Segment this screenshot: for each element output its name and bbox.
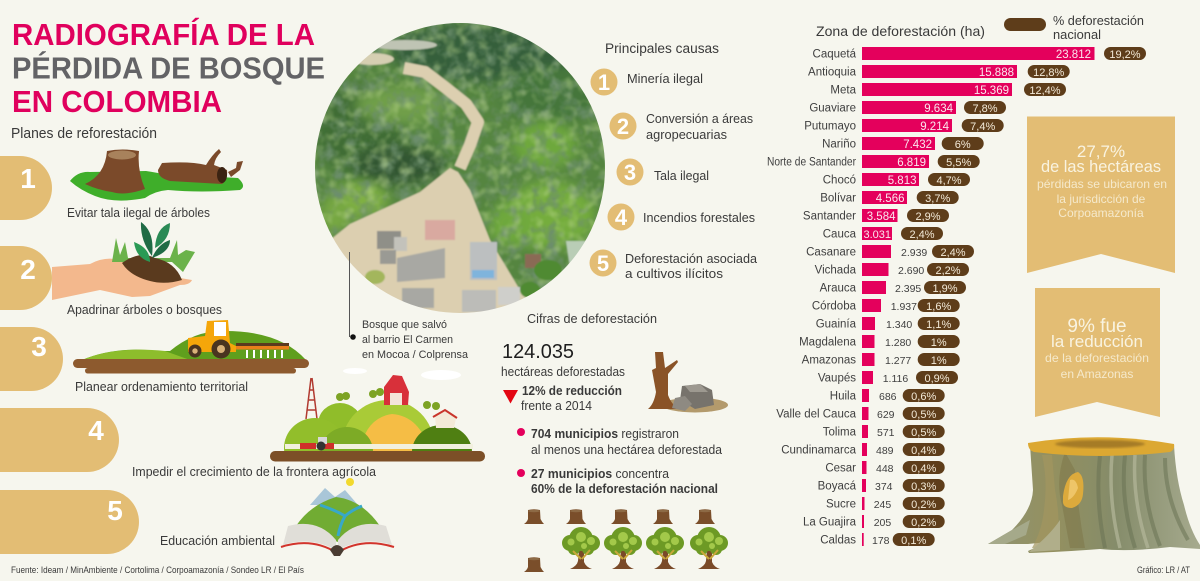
row: Antioquia <box>808 65 1070 79</box>
row: Meta: 12,4% <box>1029 85 1061 97</box>
row: Chocó <box>823 173 970 187</box>
row: Cesar: 448 <box>876 463 894 475</box>
row: Chocó: Chocó <box>823 174 856 186</box>
row: Norte de Santander <box>767 155 980 169</box>
title: EN COLOMBIA <box>12 84 222 119</box>
row: Putumayo: 7,4% <box>970 121 995 133</box>
stat: 124.035 hectáreas: hectáreas deforestadas <box>501 364 625 379</box>
step 5 tab <box>0 490 139 554</box>
legend: % deforestación <box>1053 13 1144 28</box>
cause 1: 1 <box>598 70 610 95</box>
row: Huila <box>830 389 945 403</box>
row: Chocó: 4,7% <box>936 175 962 187</box>
step 2 tab: 2 <box>20 254 36 285</box>
banner: 27,7%: de las hectáreas <box>1041 157 1161 176</box>
callout: photo caption: en Mocoa / Colprensa <box>362 349 469 361</box>
row: Valle del Cauca: 0,5% <box>911 409 936 421</box>
row: Caldas: Caldas <box>820 534 856 546</box>
icon: farm landscape <box>270 368 485 462</box>
fact: 704 municipios <box>517 426 723 457</box>
heading: planes de reforestación: Planes de reforestación <box>11 125 157 142</box>
row: Caquetá: Caquetá <box>813 48 857 60</box>
fact: 27 municipios <box>517 466 718 496</box>
row: Bolívar: 4.566 <box>876 193 904 205</box>
fact: 704 municipios: 704 municipios registraron <box>531 426 679 441</box>
row: Magdalena <box>799 335 960 349</box>
row: Putumayo <box>804 119 1004 133</box>
row: Meta: Meta <box>830 84 857 96</box>
row: Cundinamarca <box>781 443 945 457</box>
cause 3 <box>616 158 709 186</box>
row: Córdoba <box>812 299 960 313</box>
fact: 27 municipios: 60% de la deforestación nacional <box>531 481 718 496</box>
cause 4: 4 <box>615 205 628 230</box>
row: Bolívar: Bolívar <box>820 192 856 204</box>
row: Magdalena: 1.280 <box>885 337 911 349</box>
step 4 tab: 4 <box>88 415 104 446</box>
panel: principales causas <box>590 41 758 281</box>
stat: 124.035 hectáreas <box>501 341 625 379</box>
row: Vichada: Vichada <box>815 264 857 276</box>
stat: 12% reducción <box>503 384 622 413</box>
legend <box>1004 13 1144 42</box>
stat: 12% reducción: 12% de reducción <box>522 384 622 398</box>
row: Caldas: 178 <box>872 535 890 547</box>
panel: cifras de deforestación <box>501 311 728 572</box>
icon: open book with landscape <box>281 478 394 556</box>
row: Sucre: 245 <box>874 499 891 511</box>
banner: 27,7% <box>1027 116 1175 273</box>
photo: forest above El Carmen <box>313 20 608 320</box>
row: Cauca: Cauca <box>823 228 857 240</box>
row: Caquetá: 19,2% <box>1109 49 1141 61</box>
row: Boyacá: Boyacá <box>818 480 857 492</box>
row: Cesar: Cesar <box>825 462 856 474</box>
banner: 9% reducción: de la deforestación <box>1045 351 1149 365</box>
row: Caldas <box>820 533 935 547</box>
row: Cauca: 2,4% <box>909 229 935 241</box>
row: Vaupés <box>818 371 958 385</box>
row: Nariño: 7.432 <box>903 139 932 151</box>
row: Arauca: 1,9% <box>932 283 958 295</box>
label: impedir: Impedir el crecimiento de la frontera agrícola <box>132 465 376 479</box>
row: Santander: 2,9% <box>915 211 941 223</box>
callout: photo caption <box>350 252 469 361</box>
row: Cauca: 3.031 <box>863 229 891 241</box>
row: Guaviare: 7,8% <box>972 103 998 115</box>
source note: Fuente: Ideam / MinAmbiente / Cortolima / Corpoamazonía / Sondeo LR / El País <box>11 565 304 576</box>
cause 2: Conversión a áreas <box>646 111 753 126</box>
row: Cesar: 0,4% <box>911 463 936 475</box>
row: Valle del Cauca: Valle del Cauca <box>776 408 857 420</box>
row: Tolima <box>823 425 945 439</box>
row: Arauca: Arauca <box>820 282 857 294</box>
row: Casanare: 2.939 <box>901 247 927 259</box>
step 5 tab: 5 <box>107 495 123 526</box>
icon: tractor on field <box>73 320 309 374</box>
row: Nariño: 6% <box>955 139 971 151</box>
row: Boyacá <box>818 479 945 493</box>
row: Cesar <box>825 461 945 475</box>
row: Huila: Huila <box>830 390 857 402</box>
row: Cundinamarca: 489 <box>876 445 894 457</box>
pictogram: stumps and trees <box>524 509 728 572</box>
row: Magdalena: 1% <box>931 337 947 349</box>
row: Córdoba: Córdoba <box>812 300 857 312</box>
row: Meta <box>830 83 1066 97</box>
heading: principales causas: Principales causas <box>605 41 719 56</box>
row: Nariño: Nariño <box>822 138 856 150</box>
row: Amazonas: Amazonas <box>802 354 856 366</box>
row: Arauca <box>820 281 966 295</box>
banner: 9% reducción: la reducción <box>1051 332 1143 351</box>
row: La Guajira <box>803 515 945 529</box>
row: Bolívar <box>820 191 959 205</box>
row: Norte de Santander: Norte de Santander <box>767 156 856 168</box>
bar chart: zona de deforestación <box>767 13 1146 547</box>
banner: 27,7%: la jurisdicción de <box>1057 192 1146 206</box>
row: Caldas: 0,1% <box>901 535 926 547</box>
row: Vaupés: 1.116 <box>883 373 908 385</box>
row: Sucre: Sucre <box>826 498 856 510</box>
row: Santander <box>803 209 949 223</box>
cause 2: 2 <box>617 114 629 139</box>
row: Sucre: 0,2% <box>911 499 936 511</box>
row: Santander: 3.584 <box>867 211 896 223</box>
row: Casanare <box>806 245 974 259</box>
row: Vaupés: 0,9% <box>924 373 950 385</box>
title: PÉRDIDA DE BOSQUE <box>12 50 325 86</box>
step 3 tab: 3 <box>31 331 47 362</box>
row: Guaviare <box>809 101 1006 115</box>
row: Córdoba: 1.937 <box>891 301 917 313</box>
panel: planes de reforestación <box>0 125 485 556</box>
row: Guainía: Guainía <box>816 318 857 330</box>
row: Antioquia: Antioquia <box>808 66 857 78</box>
callout: photo caption: Bosque que salvó <box>362 319 447 331</box>
fact: 704 municipios: al menos una hectárea deforestada <box>531 442 723 457</box>
icon: hand with plant <box>52 222 195 300</box>
step 4 tab <box>0 408 119 472</box>
row: La Guajira: La Guajira <box>803 516 857 528</box>
banner: 27,7%: Corpoamazonía <box>1058 206 1144 220</box>
icon: large tree stump <box>988 437 1200 553</box>
row: Norte de Santander: 6.819 <box>897 157 926 169</box>
row: Arauca: 2.395 <box>895 283 921 295</box>
callout: photo caption: al barrio El Carmen <box>362 334 453 346</box>
stat: 12% reducción: frente a 2014 <box>521 398 592 413</box>
label: planear: Planear ordenamiento territorial <box>75 380 248 394</box>
row: Tolima: Tolima <box>823 426 857 438</box>
row: Guainía: 1,1% <box>926 319 951 331</box>
cause 1 <box>590 68 703 96</box>
row: Amazonas: 1.277 <box>885 355 911 367</box>
row: La Guajira: 205 <box>874 517 891 529</box>
row: Caquetá: 23.812 <box>1056 49 1091 61</box>
title: RADIOGRAFÍA DE LA <box>12 17 315 52</box>
row: Putumayo: Putumayo <box>804 120 856 132</box>
cause 5: Deforestación asociada <box>625 251 758 266</box>
banner: 27,7%: pérdidas se ubicaron en <box>1037 177 1167 191</box>
label: evitar tala: Evitar tala ilegal de árboles <box>67 206 210 220</box>
houses <box>425 220 455 240</box>
row: Boyacá: 0,3% <box>911 481 936 493</box>
step 3 tab <box>0 327 63 391</box>
row: Vaupés: Vaupés <box>818 372 856 384</box>
title <box>12 17 325 119</box>
banner: 9% reducción: en Amazonas <box>1061 367 1133 381</box>
cause 3: 3 <box>624 160 636 185</box>
chart heading: Zona de deforestación (ha) <box>816 23 985 39</box>
debris channel <box>404 68 478 168</box>
cause 3: Tala ilegal <box>654 168 709 183</box>
banner: 9% reducción <box>1035 288 1160 417</box>
row: Boyacá: 374 <box>875 481 893 493</box>
cause 4: Incendios forestales <box>643 210 755 225</box>
row: Chocó: 5.813 <box>888 175 916 187</box>
row: Huila: 0,6% <box>911 391 936 403</box>
stat: 124.035 hectáreas: 124.035 <box>502 341 574 363</box>
cause 5: a cultivos ilícitos <box>625 266 724 281</box>
row: Meta: 15.369 <box>974 85 1009 97</box>
cause 5 <box>590 250 758 281</box>
row: Vichada: 2.690 <box>898 265 924 277</box>
row: La Guajira: 0,2% <box>911 517 936 529</box>
row: Norte de Santander: 5,5% <box>946 157 971 169</box>
row: Santander: Santander <box>803 210 856 222</box>
row: Huila: 686 <box>879 391 897 403</box>
row: Guaviare: Guaviare <box>809 102 856 114</box>
row: Casanare: 2,4% <box>940 247 966 259</box>
cause 2 <box>610 111 753 142</box>
cause 5: 5 <box>597 251 609 276</box>
row: Tolima: 0,5% <box>911 427 936 439</box>
row: Caquetá <box>813 47 1146 61</box>
row: Cundinamarca: Cundinamarca <box>781 444 857 456</box>
label: apadrinar: Apadrinar árboles o bosques <box>67 303 222 317</box>
row: Guainía: 1.340 <box>886 319 912 331</box>
icon: dead tree and rocks <box>648 352 728 412</box>
cause 1: Minería ilegal <box>627 71 703 86</box>
row: Sucre <box>826 497 945 511</box>
step 2 tab <box>0 246 52 310</box>
row: Magdalena: Magdalena <box>799 336 857 348</box>
step 1 tab <box>0 156 52 220</box>
row: Valle del Cauca <box>776 407 945 421</box>
row: Putumayo: 9.214 <box>920 121 950 133</box>
row: Valle del Cauca: 629 <box>877 409 895 421</box>
fact: 27 municipios: 27 municipios concentra <box>531 466 670 481</box>
banner: 9% reducción: 9% fue <box>1067 316 1127 337</box>
icon: stump and log <box>70 149 243 201</box>
row: Bolívar: 3,7% <box>925 193 950 205</box>
row: Vichada: 2,2% <box>935 265 961 277</box>
legend: nacional <box>1053 27 1101 42</box>
banner: 27,7%: 27,7% <box>1077 142 1125 161</box>
row: Antioquia: 12,8% <box>1033 67 1065 79</box>
heading: cifras: Cifras de deforestación <box>527 311 657 326</box>
row: Casanare: Casanare <box>806 246 856 258</box>
row: Amazonas: 1% <box>931 355 947 367</box>
cause 2: agropecuarias <box>646 127 727 142</box>
cause 4 <box>608 204 755 230</box>
row: Vichada <box>815 263 969 277</box>
label: educación ambiental: Educación ambiental <box>160 534 275 548</box>
row: Guaviare: 9.634 <box>924 103 954 115</box>
row: Amazonas <box>802 353 960 367</box>
row: Córdoba: 1,6% <box>926 301 951 313</box>
row: Guainía <box>816 317 960 331</box>
row: Antioquia: 15.888 <box>979 67 1014 79</box>
row: Nariño <box>822 137 984 151</box>
row: Tolima: 571 <box>877 427 895 439</box>
row: Cundinamarca: 0,4% <box>911 445 936 457</box>
row: Cauca <box>823 227 943 241</box>
step 1 tab: 1 <box>20 163 36 194</box>
